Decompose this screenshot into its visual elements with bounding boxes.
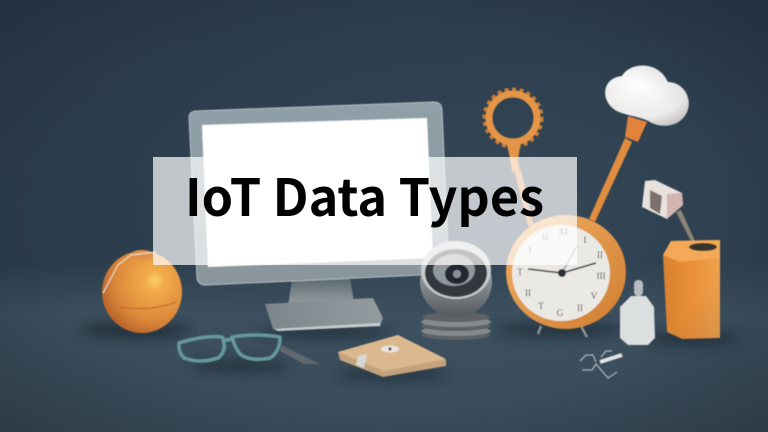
clock numerals: V bbox=[591, 291, 598, 301]
icon: screw bbox=[280, 345, 320, 364]
clock hands bbox=[528, 269, 562, 273]
icon: glasses bbox=[179, 335, 280, 361]
clock numerals: I bbox=[584, 235, 586, 245]
clock numerals: G bbox=[557, 308, 564, 318]
clock numerals: II bbox=[542, 232, 548, 242]
icon: computer monitor bbox=[189, 102, 449, 331]
clock numerals: T bbox=[538, 301, 544, 311]
clock numerals bbox=[517, 227, 606, 318]
icon: analog clock bbox=[506, 215, 626, 337]
title banner bbox=[153, 157, 577, 265]
icon: gear on a stem bbox=[484, 90, 542, 226]
icon: webcam bbox=[420, 241, 492, 340]
monitor screen bbox=[202, 118, 433, 267]
icon: cloud on a pole bbox=[589, 65, 689, 222]
ground shadows bbox=[80, 321, 740, 380]
icon: white bottle bbox=[620, 280, 655, 345]
icon: orange sphere bbox=[102, 250, 182, 333]
icon: cube on a pin bbox=[642, 180, 695, 243]
clock numerals: XI bbox=[558, 227, 568, 237]
cloud shape bbox=[605, 65, 689, 126]
clock numerals: II bbox=[525, 288, 531, 298]
clock numerals: T bbox=[517, 267, 523, 277]
icon: wooden square device bbox=[338, 335, 446, 377]
clock numerals: II bbox=[597, 250, 603, 260]
monitor stand neck bbox=[287, 278, 355, 311]
webcam stacked base bbox=[422, 330, 490, 340]
monitor stand base bbox=[265, 298, 383, 331]
clock ring bbox=[506, 215, 626, 329]
webcam housing bbox=[420, 247, 492, 317]
title: IoT Data Types bbox=[185, 157, 544, 231]
monitor bezel bbox=[189, 102, 449, 285]
icon: orange cylinder bbox=[663, 240, 720, 339]
icon: small wire clip bbox=[580, 351, 622, 378]
background table surface bbox=[0, 262, 768, 432]
clock numerals: II bbox=[577, 303, 583, 313]
clock numerals: I bbox=[528, 245, 532, 255]
clock face bbox=[512, 225, 610, 321]
clock numerals: III bbox=[596, 271, 606, 281]
cloud pole bbox=[589, 138, 632, 222]
